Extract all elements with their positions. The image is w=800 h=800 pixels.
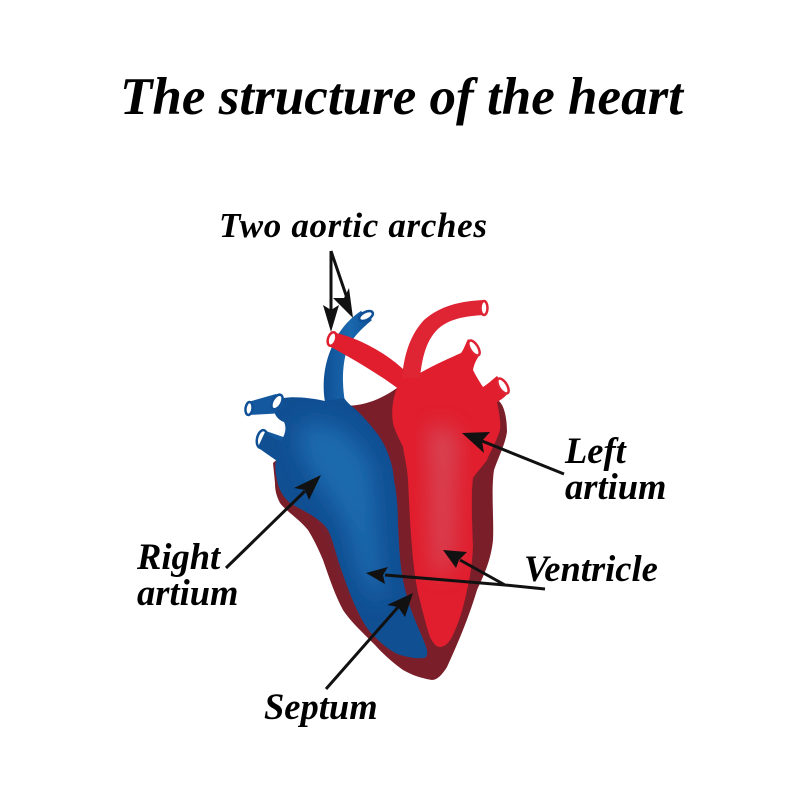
arrows: ventricle bbox=[366, 550, 545, 589]
label: right artium: Right bbox=[136, 536, 222, 577]
red vessel: branch to left bbox=[326, 331, 404, 390]
right side chambers (blue) bbox=[258, 397, 427, 658]
arrow: septum bbox=[326, 593, 413, 689]
left side chambers (red) bbox=[392, 339, 509, 647]
arrow: left artium bbox=[462, 432, 564, 474]
arrow: right artium bbox=[226, 475, 321, 568]
blue vessel: pulmonary arch bbox=[324, 309, 374, 402]
label: two aortic arches: Two aortic arches bbox=[219, 206, 487, 245]
arrows: two aortic arches bbox=[323, 251, 353, 332]
label: ventricle: Ventricle bbox=[524, 548, 658, 589]
blue vessel: upper left tube bbox=[245, 393, 288, 415]
label: right artium: artium bbox=[137, 572, 238, 613]
label: left artium: artium bbox=[565, 466, 666, 507]
red vessel: aortic arch bbox=[402, 300, 488, 378]
label: left artium: Left bbox=[564, 430, 628, 471]
heart outer wall bbox=[273, 388, 507, 680]
blue vessel: lower left tube bbox=[255, 429, 292, 463]
label: septum: Septum bbox=[264, 686, 378, 727]
red vessel openings bbox=[466, 339, 511, 395]
heart diagram bbox=[245, 300, 511, 680]
title: The structure of the heart bbox=[120, 68, 685, 126]
